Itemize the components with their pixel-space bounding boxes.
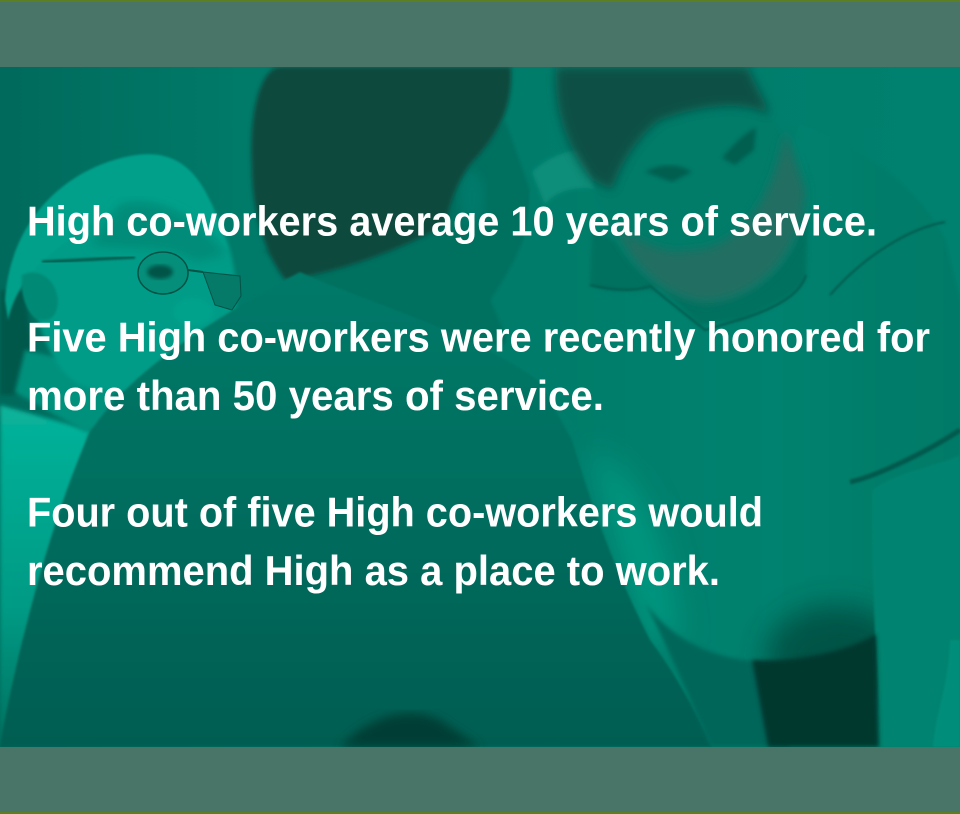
statement three: recommend High as a place to work.	[27, 547, 720, 594]
statement two: Five High co-workers were recently honored for	[27, 314, 930, 360]
man facing left: forearm	[874, 458, 957, 710]
man facing left: sleeve seams	[830, 222, 960, 482]
bottom edge line	[0, 812, 960, 814]
top band	[0, 0, 960, 67]
statement three: Four out of five High co-workers would	[27, 488, 763, 536]
man facing left: polo shirt	[498, 125, 960, 700]
man facing left: shoulder highlight	[533, 152, 592, 202]
man with back to camera: shirt	[0, 272, 712, 747]
statement two: more than 50 years of service.	[27, 372, 604, 419]
woman at left	[0, 154, 241, 747]
man with back to camera: lower shadow	[340, 713, 480, 747]
man facing left: light fold on belly	[590, 450, 680, 640]
bottle	[933, 640, 960, 747]
statement three	[27, 488, 763, 594]
man facing left: head	[556, 67, 805, 302]
statement one: High co-workers average 10 years of service.	[27, 198, 877, 244]
statement two	[27, 314, 930, 419]
man with back to camera: hair	[251, 67, 511, 280]
man facing left: collar	[590, 210, 808, 330]
top edge line	[0, 0, 960, 2]
bottom band	[0, 747, 960, 814]
jeans and belt	[645, 603, 879, 747]
man with back to camera: neck and face shadow	[314, 124, 529, 344]
man facing left: belly shadow	[756, 594, 878, 688]
man with back to camera: ear	[462, 175, 482, 220]
